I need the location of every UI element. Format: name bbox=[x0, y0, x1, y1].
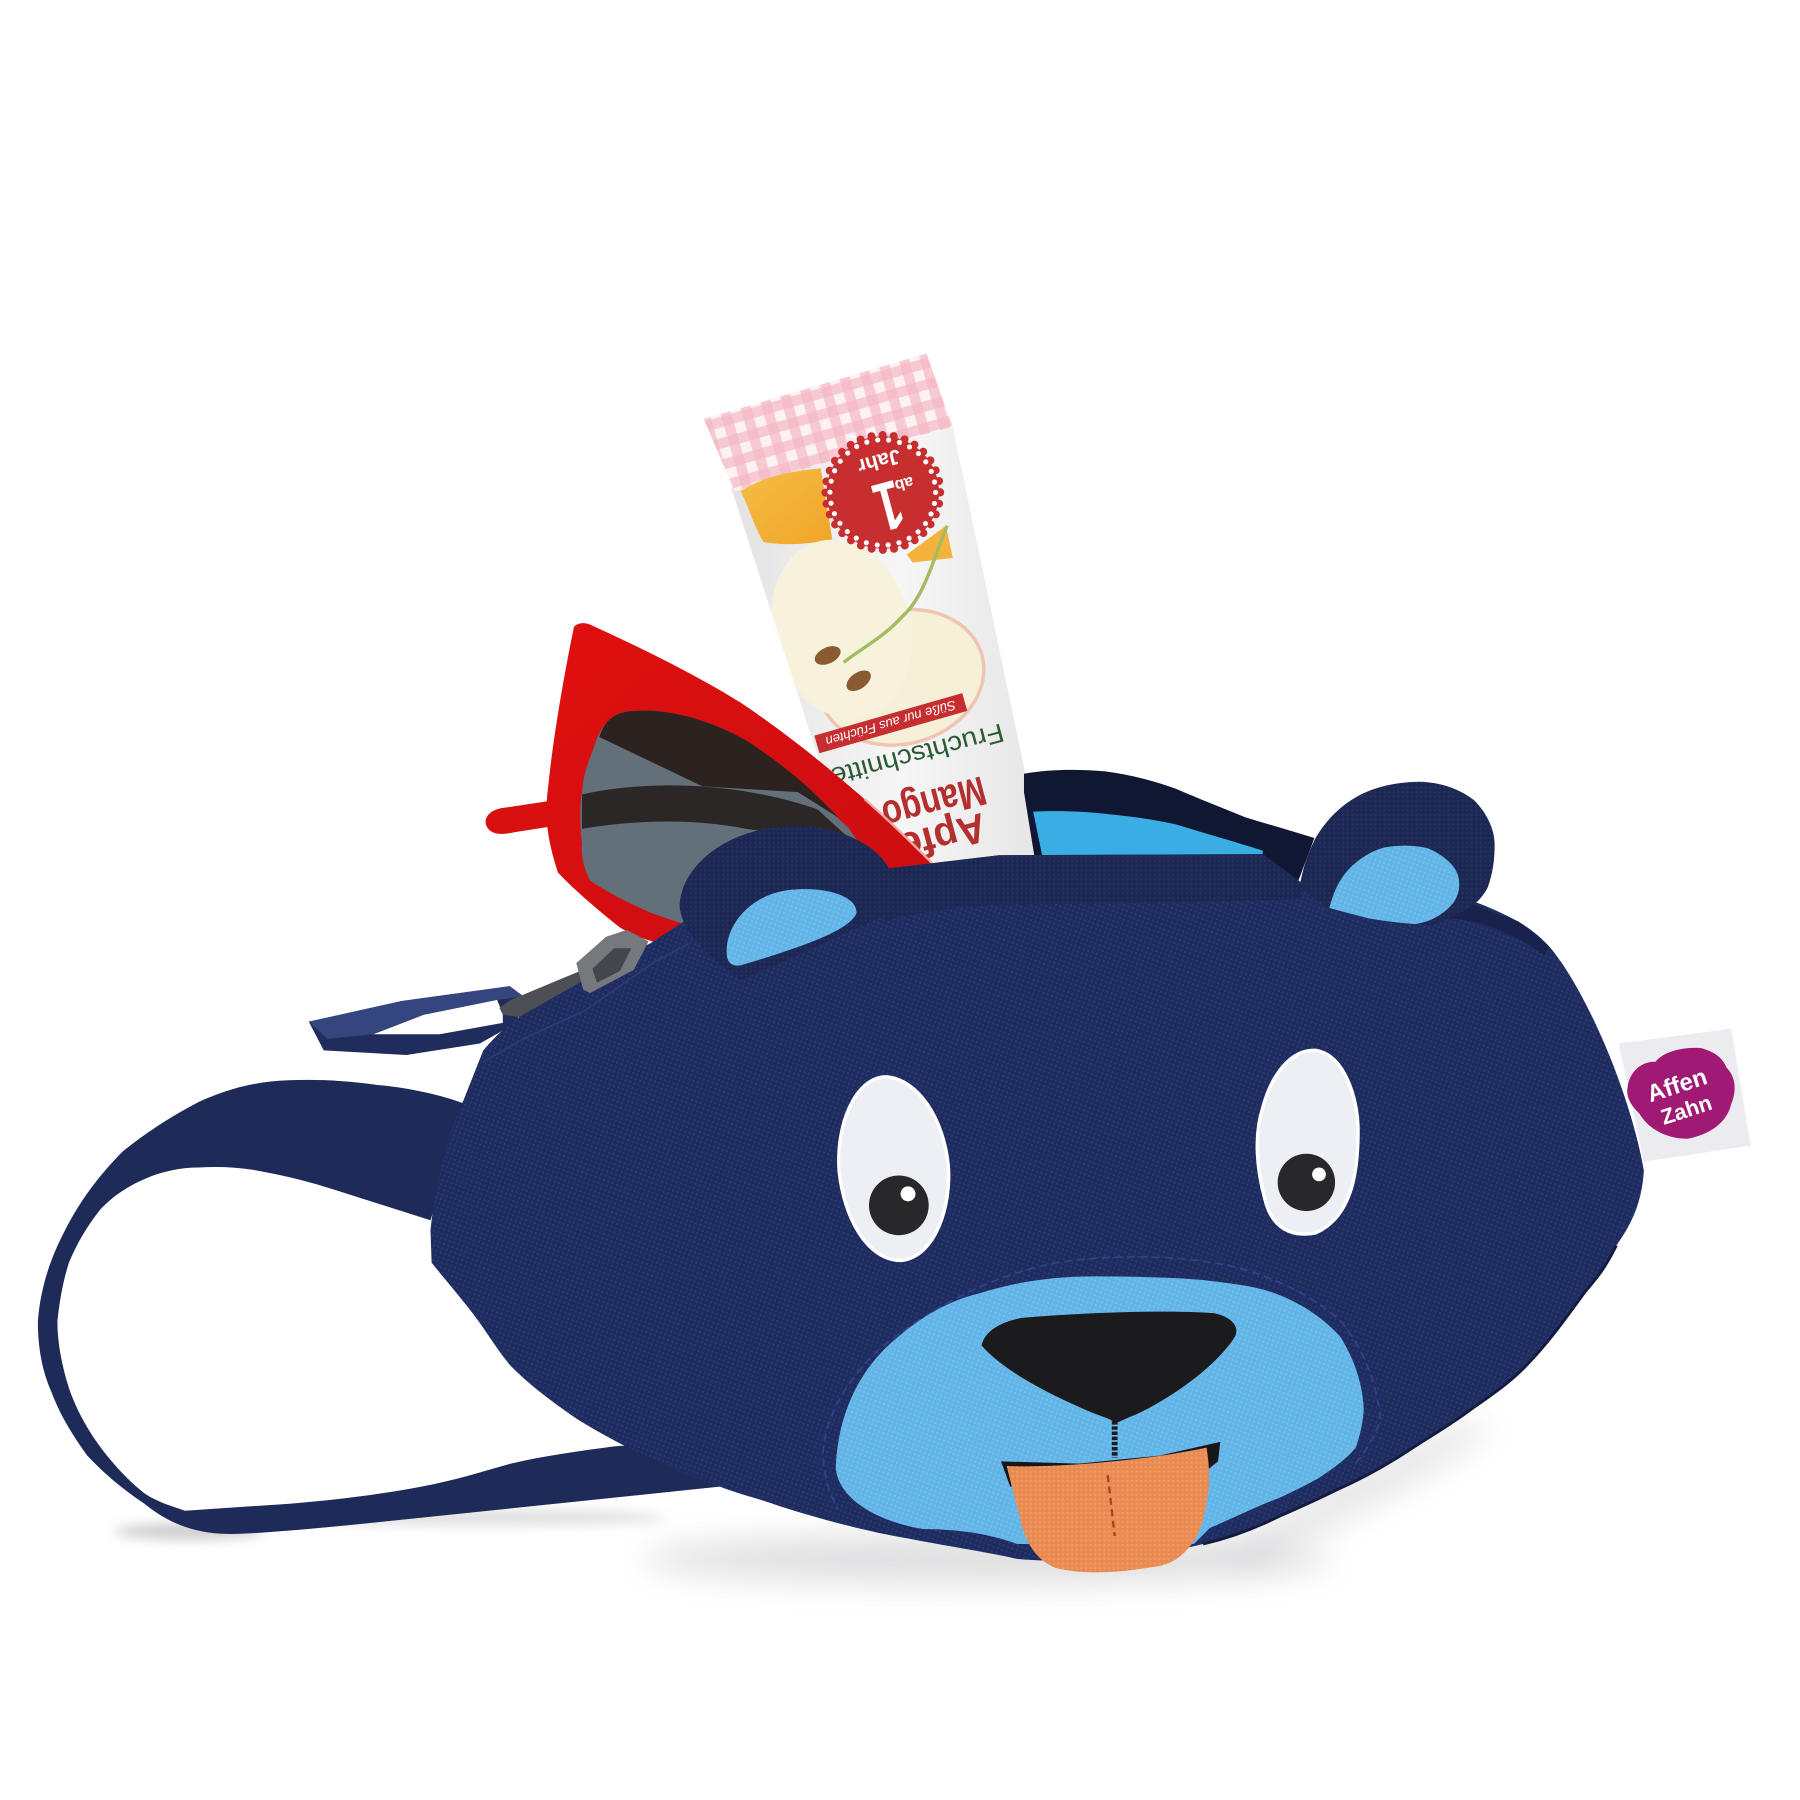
snack bar wrapper bbox=[704, 354, 1042, 874]
brand logo: Zahn bbox=[1658, 1090, 1715, 1130]
waist strap bbox=[38, 1080, 720, 1534]
right eye bbox=[1257, 1050, 1358, 1234]
metal zipper slider bbox=[499, 930, 649, 1017]
frame highlight bbox=[864, 799, 932, 863]
ground shadow bbox=[115, 1406, 1495, 1584]
lens reflection upper bbox=[599, 710, 838, 817]
sunglasses bbox=[486, 623, 932, 945]
lens reflection arm bbox=[582, 785, 855, 844]
left eye bbox=[839, 1077, 949, 1260]
right ear bbox=[1299, 782, 1495, 926]
tongue bbox=[1001, 1442, 1220, 1572]
left ear bbox=[680, 826, 891, 980]
temple arm tip bbox=[486, 801, 551, 834]
bag inner lining and zipper bbox=[1024, 770, 1314, 884]
bottom piping bbox=[1203, 1246, 1616, 1544]
tag fabric bbox=[1619, 1029, 1751, 1162]
flavour name: Mango: Mango bbox=[877, 767, 991, 839]
red tagline band: Süße nur aus Früchten bbox=[824, 697, 958, 749]
muzzle stitching bbox=[823, 1257, 1380, 1510]
product type label: Fruchtschnitte bbox=[828, 717, 1007, 792]
brand logo: Affen bbox=[1644, 1063, 1711, 1108]
left fold seam bbox=[483, 944, 689, 1062]
body shape bbox=[430, 854, 1644, 1561]
right fold band bbox=[1449, 899, 1550, 955]
brand logo bbox=[1627, 1048, 1735, 1139]
age badge: ab bbox=[893, 472, 916, 495]
age badge: 1 bbox=[866, 465, 912, 547]
dark lens bbox=[580, 710, 872, 941]
zipper pull tab bbox=[309, 986, 523, 1055]
age badge: Jahr bbox=[855, 444, 903, 478]
flavour name: Apfel: Apfel bbox=[885, 804, 991, 874]
frame bbox=[546, 623, 932, 945]
philtrum stitch bbox=[1112, 1421, 1117, 1458]
apple stem bbox=[844, 526, 947, 662]
mango picture bbox=[740, 468, 953, 562]
wrapper body bbox=[731, 427, 1042, 872]
gingham seal bbox=[704, 354, 953, 491]
product illustration: bear belt bag bbox=[38, 354, 1750, 1595]
apple picture bbox=[771, 540, 986, 747]
brand tag bbox=[1619, 1029, 1751, 1162]
nose bbox=[982, 1312, 1236, 1423]
bag body bbox=[430, 854, 1644, 1561]
muzzle bbox=[836, 1276, 1364, 1544]
age badge bbox=[825, 435, 940, 550]
apple seed bbox=[812, 642, 844, 669]
apple seed bbox=[843, 666, 875, 695]
top fold band bbox=[884, 854, 1303, 921]
